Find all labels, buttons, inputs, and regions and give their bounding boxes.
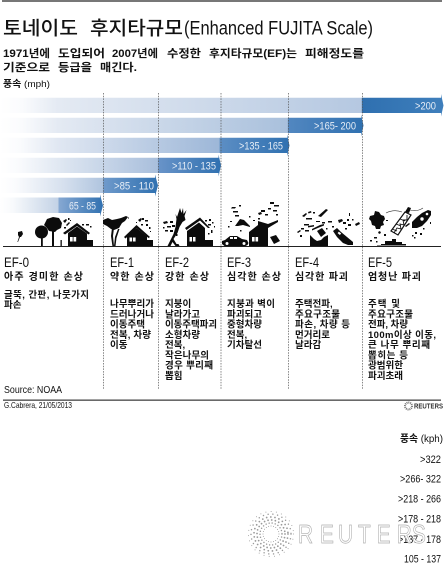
subtitle text: 수정한 xyxy=(167,46,201,60)
speed labels: >165- 200 xyxy=(314,120,356,132)
column: EF-4: 주택전파, xyxy=(295,298,333,310)
icon: EF-3 car, wrecked house and debris xyxy=(222,202,280,246)
title: (Enhanced FUJITA Scale) xyxy=(184,18,373,40)
column: EF-1: 약한 손상 xyxy=(110,270,154,283)
icon: EF-1 bent tree and house xyxy=(103,216,153,246)
column: EF-2: 날라가고 xyxy=(165,308,200,320)
arrow: EF-4 speed xyxy=(0,114,364,136)
column: EF-2 xyxy=(165,255,217,382)
column: EF-5: 광범위한 xyxy=(368,360,403,372)
column: EF-4: 날라감 xyxy=(295,339,321,351)
column: EF-5: 큰 나무 뿌리째 xyxy=(368,339,430,351)
column: EF-3: 심각한 손상 xyxy=(227,270,281,283)
column: EF-2: 작은나무의 xyxy=(165,349,209,361)
subtitle text xyxy=(3,46,364,74)
column: EF-1: EF-1 xyxy=(110,255,134,270)
column: EF-3: EF-3 xyxy=(227,255,251,270)
speed labels: >200 xyxy=(415,100,436,112)
chart: wind speed arrows xyxy=(0,94,444,216)
subtitle text: 2007년에 xyxy=(112,46,158,60)
column: EF-0: 아주 경미한 손상 xyxy=(4,270,83,283)
column: EF-1 xyxy=(110,255,154,351)
speed labels: >110 - 135 xyxy=(172,160,216,172)
column: EF-5: 뽑히는 등 xyxy=(368,349,408,361)
column: EF-3: 기차탈선 xyxy=(227,339,262,351)
title: 토네이도 xyxy=(3,18,78,40)
column: EF-1: 이동 xyxy=(110,340,128,351)
column: EF-4: 먼거리로 xyxy=(295,329,330,341)
arrow: EF-5 speed xyxy=(0,94,444,116)
column: EF-4: 주요구조물 xyxy=(295,309,340,320)
subtitle text: 기준으로 xyxy=(3,60,50,74)
column: EF-4: EF-4 xyxy=(295,255,319,270)
column: EF-4: 심각한 파괴 xyxy=(295,270,348,283)
column: EF-4: 파손, 차량 등 xyxy=(295,318,350,330)
column: EF-5 xyxy=(368,255,436,382)
column: EF-5: 파괴초래 xyxy=(368,370,403,382)
column: EF-5: 엄청난 파괴 xyxy=(368,270,421,283)
column: EF-5: EF-5 xyxy=(368,255,392,270)
icon: EF-2 broken tree and damaged house xyxy=(163,208,215,246)
title: 후지타규모 xyxy=(90,18,183,40)
column: EF-2: 지붕이 xyxy=(165,298,191,310)
column: EF-5: 100m이상 이동, xyxy=(368,329,436,341)
column: EF-1: 이동주택 xyxy=(110,318,145,330)
watermark: Reuters xyxy=(248,512,426,556)
column: EF-2: EF-2 xyxy=(165,255,189,270)
column: EF-0 xyxy=(4,255,89,311)
mph axis label: 풍속 (mph) xyxy=(3,79,50,90)
icon: EF-5 tower, car and debris xyxy=(369,207,431,246)
column: EF-2: 소형차량 xyxy=(165,329,200,341)
column: EF-3: 중형차량 xyxy=(227,318,262,330)
column: EF-2: 강한 손상 xyxy=(165,270,209,283)
subtitle text: 후지타규모(EF)는 xyxy=(209,46,297,60)
logo: Reuters small xyxy=(405,402,443,410)
column: EF-3 xyxy=(227,255,281,351)
column: EF-5: 주택 및 xyxy=(368,298,400,310)
icon: EF-4 rubble, car and debris xyxy=(297,209,360,246)
title xyxy=(3,18,373,40)
kph wind speed list: 풍속 (kph) xyxy=(400,433,443,445)
column: EF-2: 전복, xyxy=(165,340,185,351)
column: EF-0: EF-0 xyxy=(4,255,29,270)
subtitle text: 등급을 xyxy=(58,61,92,74)
column: EF-2: 이동주택파괴 xyxy=(165,318,217,330)
column: EF-3: 지붕과 벽이 xyxy=(227,298,275,310)
column: EF-1: 드러나거나 xyxy=(110,308,154,320)
credit: G.Cabrera, 21/05/2013 xyxy=(4,400,72,410)
arrow: EF-0 speed xyxy=(0,194,103,216)
speed labels: 65 - 85 xyxy=(69,200,96,212)
speed labels: >85 - 110 xyxy=(114,180,154,192)
subtitle text: 피해정도를 xyxy=(305,47,364,60)
column: EF-0: 파손 xyxy=(4,300,22,311)
column: EF-0: 글뚝, 간판, 나뭇가지 xyxy=(4,289,89,301)
kph wind speed list xyxy=(398,433,443,565)
speed labels: >135 - 165 xyxy=(239,140,283,152)
arrow: EF-3 speed xyxy=(0,134,290,156)
arrow: EF-1 speed xyxy=(0,174,158,196)
speed labels xyxy=(69,100,436,212)
icon: EF-0 kite, trees and house xyxy=(17,217,93,246)
column: EF-5: 전파, 차량 xyxy=(368,318,408,330)
column: EF-3: 파괴되고 xyxy=(227,308,262,320)
watermark: Reuters: REUTERS xyxy=(298,520,426,549)
subtitle text: 도입되어 xyxy=(58,47,105,60)
subtitle text: 1971년에 xyxy=(3,46,50,60)
column: EF-5: 주요구조물 xyxy=(368,309,413,320)
subtitle text: 매긴다. xyxy=(100,60,137,74)
column: EF-2: 경우 뿌리째 xyxy=(165,360,213,372)
source: Source: NOAA xyxy=(4,384,62,396)
column: EF-2: 뽑힘 xyxy=(165,370,182,382)
column: EF-1: 전복, 차량 xyxy=(110,329,151,341)
arrow: EF-2 speed xyxy=(0,154,221,176)
column: EF-4 xyxy=(295,255,350,351)
column: EF-3: 전복, xyxy=(227,330,247,341)
column: EF-1: 나무뿌리가 xyxy=(110,298,154,310)
